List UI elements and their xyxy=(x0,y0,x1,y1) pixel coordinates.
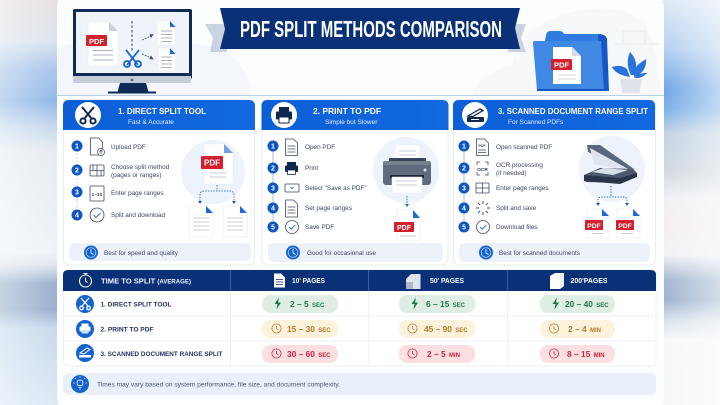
steps list: 1–10 xyxy=(92,192,103,198)
steps list xyxy=(268,139,367,234)
footnote text: Times may vary based on system performance, file size, and document complexity. xyxy=(97,382,340,388)
row: print to pdf: 2 – 4 MIN xyxy=(568,324,601,334)
footnote callout xyxy=(63,373,656,395)
row: print to pdf: 2. PRINT TO PDF xyxy=(100,326,154,334)
steps list: (if needed) xyxy=(496,170,527,177)
panel: scanned document range split xyxy=(453,100,656,265)
steps list: Set page ranges xyxy=(305,205,352,212)
card 2 note: Good for occasional use xyxy=(307,250,376,257)
illustration: monitor with PDF split xyxy=(73,9,192,94)
row: direct split tool xyxy=(76,295,615,313)
icon: printer badge xyxy=(271,102,297,128)
steps list: 1 xyxy=(462,144,466,150)
steps list: 4 xyxy=(75,212,79,220)
card 2 note xyxy=(268,243,443,262)
steps list: 3 xyxy=(462,186,466,192)
cut line xyxy=(131,21,133,52)
illustration: printer to pdf: PDF xyxy=(397,225,412,232)
card 3 note xyxy=(459,243,650,262)
steps list: 2 xyxy=(271,166,275,172)
steps list: 3 xyxy=(271,186,275,192)
row: scanned document range split xyxy=(76,344,615,363)
illustration: shelf and plant xyxy=(612,31,659,93)
steps list: 1 xyxy=(75,144,79,150)
row: print to pdf: 15 – 30 SEC xyxy=(287,324,331,334)
steps list: 3 xyxy=(75,190,79,196)
card 1 subtitle: Fast & Accurate xyxy=(128,119,174,126)
title banner xyxy=(205,8,526,52)
steps list: PDF xyxy=(478,144,486,148)
steps list: 5 xyxy=(462,224,466,232)
steps list: (pages or ranges) xyxy=(111,172,161,179)
icon: scanner badge xyxy=(462,102,488,128)
row: direct split tool: 2 – 5 SEC xyxy=(290,299,325,309)
illustration: pdf split into pages: PDF xyxy=(204,158,220,168)
steps list: Open scanned PDF xyxy=(496,144,552,151)
row: print to pdf: 45 – 90 SEC xyxy=(424,324,468,334)
illustration: scanner to pdfs: PDF xyxy=(618,223,632,230)
steps list: OCR processing xyxy=(496,162,543,169)
table header: TIME TO SPLIT (AVERAGE) xyxy=(101,276,191,286)
step rail xyxy=(463,150,465,225)
row: scanned document range split: 8 – 15 MIN xyxy=(567,349,605,359)
icon: scissors xyxy=(124,50,141,67)
steps list: Select "Save as PDF" xyxy=(305,185,367,192)
icon: scissors badge xyxy=(75,102,101,128)
table header: 50' PAGES xyxy=(430,278,464,285)
illustration: printer to pdf xyxy=(373,137,439,240)
arrows xyxy=(142,34,153,59)
header band xyxy=(57,2,664,96)
card 3 heading: 3. SCANNED DOCUMENT RANGE SPLIT xyxy=(498,106,648,116)
steps list: Download files xyxy=(496,224,538,231)
steps list: Save PDF xyxy=(305,224,334,231)
illustration: scanner to pdfs: PDF xyxy=(587,223,601,230)
panel: direct split tool xyxy=(63,100,255,265)
illustration: scanner to pdfs xyxy=(579,136,645,238)
comparison table xyxy=(63,270,656,366)
steps list: 4 xyxy=(271,206,275,212)
row: print to pdf xyxy=(76,320,615,338)
table header: 10' PAGES xyxy=(292,278,325,285)
card 1 note: Best for speed and quality xyxy=(104,250,179,257)
table header xyxy=(80,273,608,289)
row: scanned document range split: 2 – 5 MIN xyxy=(427,349,460,359)
illustration: blue folder: PDF xyxy=(554,61,569,70)
panel: print to pdf xyxy=(262,100,448,265)
steps list: Print xyxy=(305,165,318,172)
illustration: pdf split into pages xyxy=(181,140,247,237)
step rail xyxy=(76,150,78,215)
row: scanned document range split: 30 – 60 SEC xyxy=(287,349,331,359)
icon: light bulb xyxy=(71,375,89,393)
steps list: Split and save xyxy=(496,205,537,212)
row: scanned document range split: 3. SCANNED DOCUMENT RANGE SPLIT xyxy=(100,351,222,358)
steps list: Enter page ranges xyxy=(111,190,164,197)
step rail xyxy=(272,150,274,225)
steps list: Choose split method xyxy=(111,164,170,171)
steps list: 4 xyxy=(462,206,466,212)
steps list: 2 xyxy=(462,166,466,172)
card 2 subtitle: Simple but Slower xyxy=(325,119,378,126)
card 3 subtitle: For Scanned PDFs xyxy=(508,119,564,126)
title: PDF SPLIT METHODS COMPARISON xyxy=(240,16,502,42)
row: direct split tool: 1. DIRECT SPLIT TOOL xyxy=(100,302,172,308)
steps list: Split and download xyxy=(111,212,165,219)
steps list xyxy=(458,139,552,234)
card 3 note: Best for scanned documents xyxy=(499,250,580,257)
steps list xyxy=(72,138,170,222)
row: direct split tool: 6 – 15 SEC xyxy=(426,299,466,309)
card 2 heading: 2. PRINT TO PDF xyxy=(313,106,381,116)
icon: split docs xyxy=(157,21,176,71)
steps list: 5 xyxy=(271,224,275,232)
steps list: Open PDF xyxy=(305,144,335,151)
steps list: Upload PDF xyxy=(111,144,146,151)
steps list: Enter page ranges xyxy=(496,185,549,192)
steps list: OCR xyxy=(477,167,488,173)
illustration: blue folder xyxy=(533,31,609,91)
card 1 heading: 1. DIRECT SPLIT TOOL xyxy=(118,106,206,116)
icon: source pdf: PDF xyxy=(89,37,104,46)
row: direct split tool: 20 – 40 SEC xyxy=(565,299,609,309)
steps list: 2 xyxy=(75,168,79,174)
table header: 200'PAGES xyxy=(570,278,608,285)
steps list: 1 xyxy=(271,144,275,150)
card 1 note xyxy=(69,243,251,261)
